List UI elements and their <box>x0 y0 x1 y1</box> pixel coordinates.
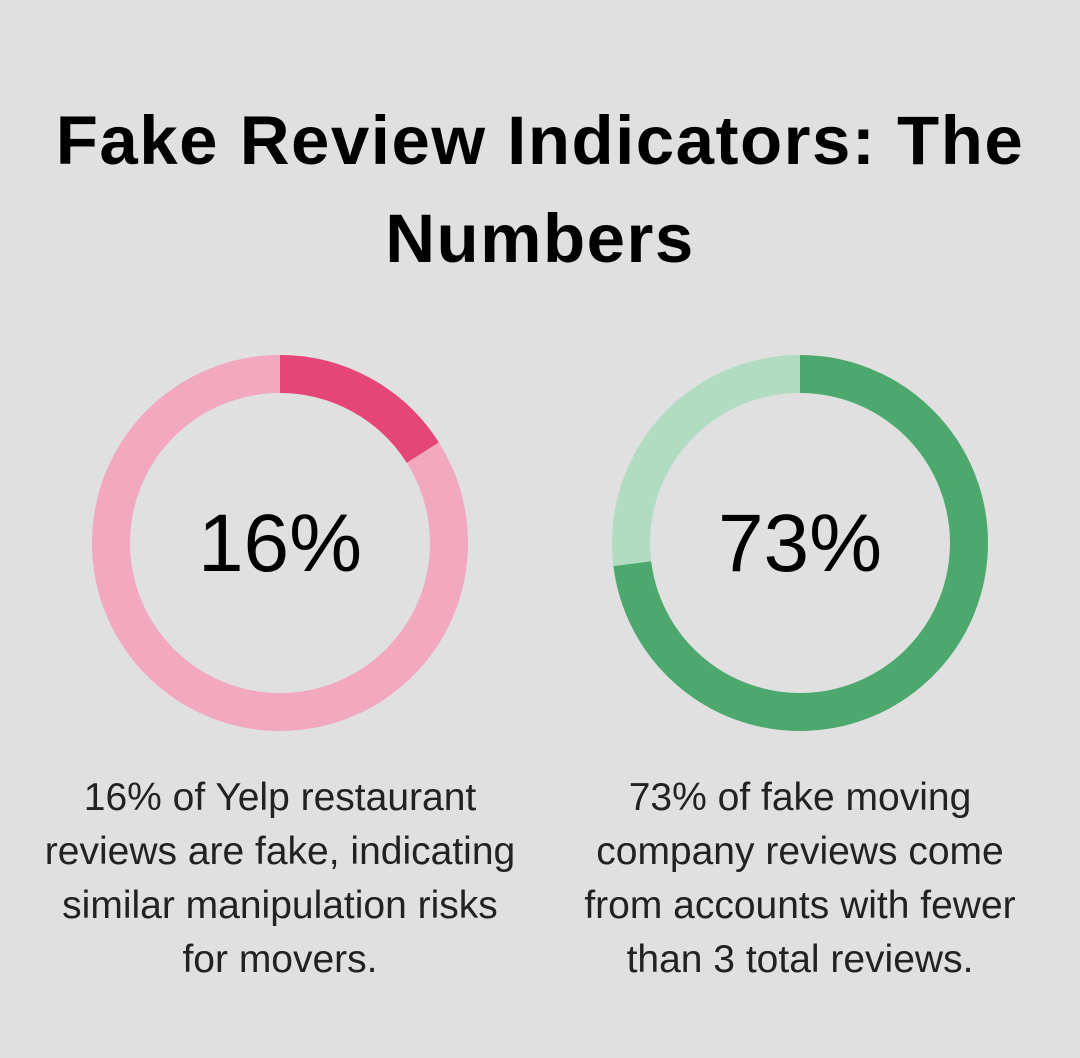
chart: donut 73%: 73% <box>718 498 882 589</box>
chart: donut 16%: 16% <box>198 498 362 589</box>
title: Numbers <box>385 200 695 277</box>
caption: right: company reviews come <box>596 830 1004 873</box>
caption: left: similar manipulation risks <box>62 884 498 927</box>
caption: right: from accounts with fewer <box>584 884 1016 927</box>
caption: right <box>584 776 1016 981</box>
caption: right: than 3 total reviews. <box>627 938 973 981</box>
chart: donut 16% <box>92 355 468 731</box>
title: Fake Review Indicators: The <box>56 102 1024 179</box>
caption: left <box>45 776 515 981</box>
caption: right: 73% of fake moving <box>629 776 971 819</box>
chart: donut 73% <box>612 355 988 731</box>
title <box>56 102 1024 277</box>
caption: left: 16% of Yelp restaurant <box>84 776 476 819</box>
caption: left: reviews are fake, indicating <box>45 830 515 873</box>
caption: left: for movers. <box>182 938 378 981</box>
